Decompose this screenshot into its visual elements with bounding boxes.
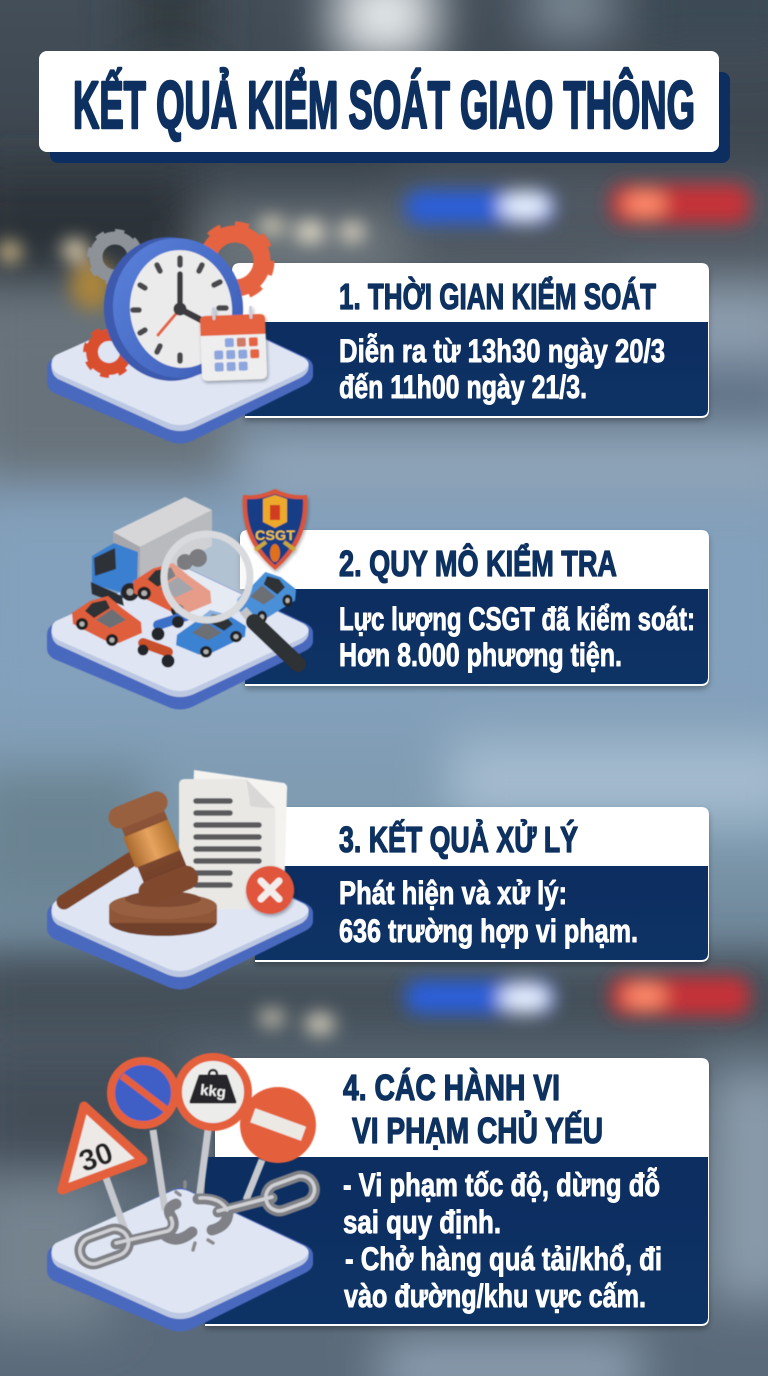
icon: vehicles under magnifier with CSGT badge bbox=[47, 489, 313, 710]
heading 4: 4. CÁC HÀNH VI bbox=[343, 1067, 560, 1108]
icon: traffic signs and broken chain bbox=[47, 1057, 318, 1332]
text 2: Hơn 8.000 phương tiện. bbox=[339, 637, 622, 673]
sign poles bbox=[105, 1130, 262, 1230]
heading 2: 2. QUY MÔ KIỂM TRA bbox=[339, 542, 617, 584]
clock bbox=[95, 229, 252, 389]
broken chain bbox=[76, 1172, 318, 1268]
motorcycles bbox=[138, 616, 186, 668]
calendar bbox=[200, 307, 267, 381]
text 4 bbox=[343, 1167, 662, 1314]
sign: speed 30: 30 bbox=[75, 1136, 117, 1179]
text 1 bbox=[339, 333, 665, 405]
text 3: 636 trường hợp vi phạm. bbox=[339, 913, 638, 949]
truck bbox=[91, 497, 212, 606]
document bbox=[179, 770, 287, 909]
title banner bbox=[39, 51, 730, 163]
sign: weight limit bbox=[178, 1057, 248, 1127]
panel 1: control time bbox=[232, 263, 709, 418]
panel 4: main violations bbox=[205, 1058, 709, 1326]
icon: clock with gears and calendar bbox=[47, 225, 313, 444]
cars bbox=[72, 563, 296, 658]
CSGT badge bbox=[243, 489, 307, 570]
heading 4: VI PHẠM CHỦ YẾU bbox=[352, 1109, 603, 1151]
text 2 bbox=[339, 601, 695, 673]
CSGT badge: CSGT bbox=[255, 527, 295, 543]
text 4: - Chở hàng quá tải/khổ, đi bbox=[345, 1241, 662, 1277]
heading 1: 1. THỜI GIAN KIỂM SOÁT bbox=[339, 275, 656, 317]
gear orange large bbox=[199, 225, 271, 297]
sign: speed 30 bbox=[62, 1106, 143, 1190]
sign: no parking bbox=[111, 1061, 175, 1125]
heading 3: 3. KẾT QUẢ XỬ LÝ bbox=[339, 818, 578, 860]
text 3: Phát hiện và xử lý: bbox=[339, 875, 567, 911]
panel 3: handling results bbox=[255, 807, 709, 962]
text 1: Diễn ra từ 13h30 ngày 20/3 bbox=[339, 333, 665, 369]
error mark bbox=[246, 866, 294, 914]
gear orange small bbox=[86, 328, 132, 376]
gavel bbox=[64, 788, 217, 936]
text 4: - Vi phạm tốc độ, dừng đỗ bbox=[343, 1167, 660, 1203]
heading 4 bbox=[343, 1067, 603, 1151]
icon: gavel and document bbox=[47, 770, 313, 990]
gear grey bbox=[90, 232, 140, 282]
text 4: sai quy định. bbox=[343, 1204, 501, 1240]
text 4: vào đường/khu vực cấm. bbox=[344, 1278, 646, 1314]
text 3 bbox=[339, 875, 638, 949]
sign: weight limit: kkg bbox=[199, 1082, 227, 1101]
magnifier bbox=[164, 534, 298, 664]
panel 2: inspection scale bbox=[240, 530, 709, 686]
sign: no entry bbox=[240, 1087, 316, 1163]
text 1: đến 11h00 ngày 21/3. bbox=[339, 369, 587, 405]
